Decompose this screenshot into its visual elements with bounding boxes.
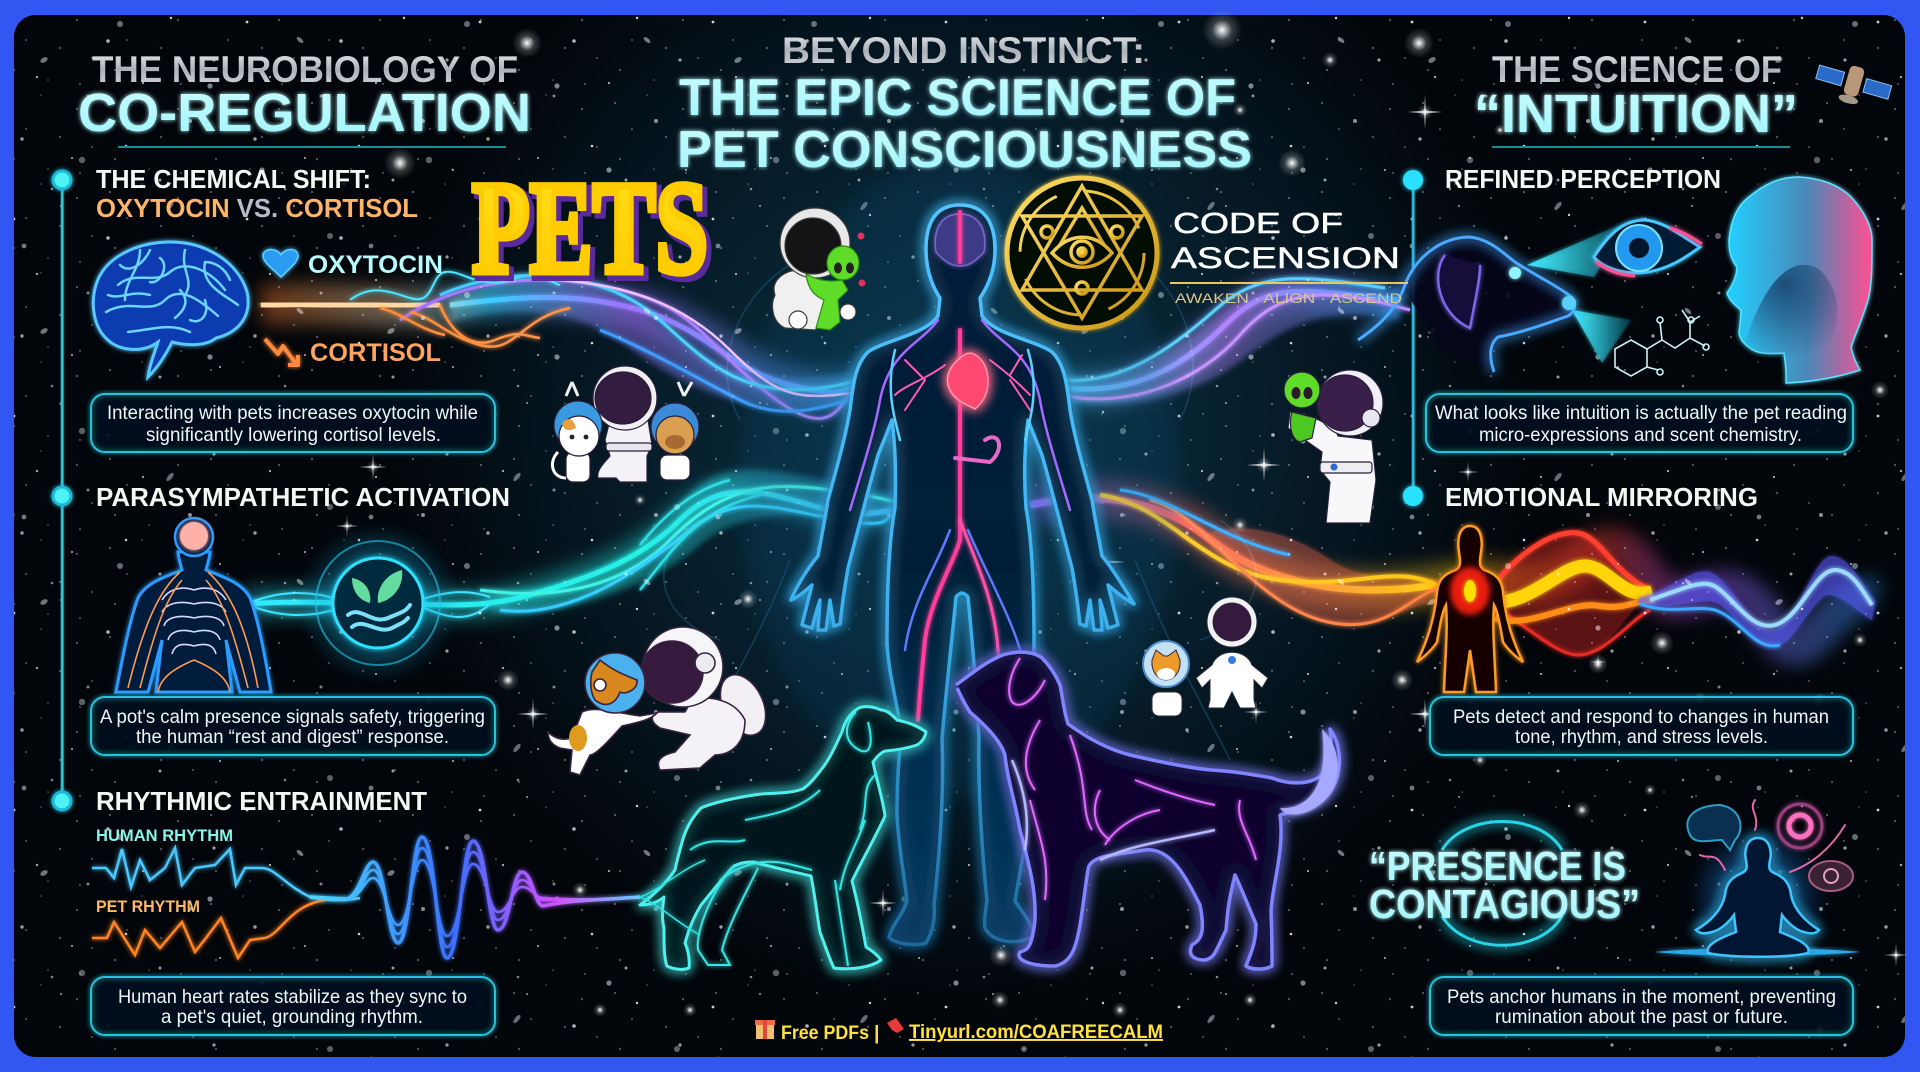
heading: chemical shift (96, 164, 418, 223)
sticker: astronaut with dog in helmet (548, 627, 775, 775)
brain in head (935, 214, 985, 266)
text box: rhythmic entrainment: a pet's quiet, grounding rhythm. (161, 1006, 423, 1028)
panel: intuition heading (1474, 49, 1798, 148)
human figure (740, 160, 1180, 945)
panel: intuition heading: “INTUITION” (1474, 84, 1798, 144)
dog body outline (956, 652, 1339, 969)
text box: emotional mirroring (1430, 697, 1853, 755)
text box: refined perception (1426, 394, 1853, 452)
ring arcs (1442, 822, 1562, 945)
icon: leaf and water orb (296, 521, 460, 685)
pets wordmark: PETS (476, 158, 712, 305)
logo: code of ascension wordmark (1170, 208, 1408, 306)
pet consciousness: PET CONSCIOUSNESS (677, 121, 1252, 179)
heading: refined perception: REFINED PERCEPTION (1445, 164, 1721, 194)
cone to eye (1527, 220, 1631, 277)
callout: presence is contagious: “PRESENCE IS (1369, 843, 1626, 889)
left fire ribbon (1211, 529, 1443, 624)
chart: synced rhythm wave (310, 837, 705, 958)
energy band: body to the intuition dog (1062, 278, 1410, 405)
label: cortisol: CORTISOL (310, 339, 441, 367)
sticker: astronaut with green alien (1284, 370, 1383, 523)
timeline right (1403, 170, 1423, 506)
cone to molecule (1572, 310, 1631, 363)
label: pet rhythm: PET RHYTHM (96, 897, 200, 916)
title: center heading (677, 30, 1252, 179)
timeline left (53, 171, 71, 810)
icon: meditating figure (1655, 823, 1860, 967)
sticker: astronaut with cat and dog (552, 366, 699, 482)
text box: presence: rumination about the past or future. (1495, 1006, 1788, 1028)
chart: pet heartbeat line (92, 900, 325, 958)
text box: rhythmic entrainment: Human heart rates stabilize as they sync to (118, 986, 467, 1008)
icon: dog reading cones (1358, 220, 1631, 372)
icon: oxytocin heart (263, 249, 298, 277)
yellow ribbon (1485, 566, 1652, 603)
vessels (850, 212, 1070, 720)
logo: code of ascension emblem (1007, 178, 1157, 328)
body outline (791, 205, 1134, 945)
footer link: Tinyurl.com/COAFREECALM (909, 1021, 1163, 1043)
logo: code of ascension wordmark: ASCENSION (1171, 242, 1400, 275)
icon: satellite (1812, 56, 1894, 114)
icon: human head profile (1727, 177, 1872, 383)
text box: presence: Pets anchor humans in the moment, preventing (1447, 986, 1836, 1008)
red ribbon (1490, 533, 1650, 655)
icon: nervous system figure (116, 518, 271, 692)
icon: human eye (1594, 220, 1702, 276)
energy band: emotional mirroring fire to blue wave (1030, 490, 1875, 655)
heading: parasympathetic activation: PARASYMPATHETIC ACTIVATION (96, 482, 510, 512)
icon: glowing fire figure (1417, 526, 1523, 692)
sticker: astronaut hugging alien (772, 208, 866, 330)
text box: parasympathetic (91, 697, 495, 755)
dog (651, 382, 699, 480)
dog head outline (1358, 237, 1574, 372)
dog ear and fur lines (1009, 658, 1256, 900)
icon: tail crescent (1280, 729, 1338, 814)
text box: rhythmic entrainment (91, 977, 495, 1035)
label: oxytocin: OXYTOCIN (308, 251, 443, 279)
panel: co-regulation heading: CO-REGULATION (78, 83, 531, 143)
text box: presence (1430, 977, 1853, 1035)
text box: refined perception: micro-expressions and scent chemistry. (1479, 424, 1802, 446)
text box: chemical shift: significantly lowering cortisol levels. (146, 424, 441, 446)
chart: human heartbeat line (92, 848, 360, 900)
text box: parasympathetic: A pot's calm presence signals safety, triggering (100, 706, 485, 728)
text box: chemical shift (91, 394, 495, 452)
logo: code of ascension wordmark: CODE OF (1173, 208, 1343, 240)
footer link: | (874, 1022, 879, 1044)
footer link: Free PDFs (781, 1022, 869, 1044)
the epic science of: THE EPIC SCIENCE OF (679, 69, 1236, 127)
panel: co-regulation heading (78, 49, 531, 148)
logo: code of ascension wordmark: AWAKEN · ALIGN · ASCEND (1175, 291, 1402, 306)
icon: cortisol down arrow (265, 339, 298, 365)
icon: thought swirls (1687, 800, 1853, 891)
dog head shading (1405, 237, 1574, 372)
icon: gift (755, 1020, 775, 1039)
icon: scent molecule (1615, 310, 1709, 376)
text box: emotional mirroring: tone, rhythm, and stress levels. (1515, 726, 1768, 748)
icon: blue brain (93, 242, 248, 377)
text box: chemical shift: Interacting with pets increases oxytocin while (107, 402, 478, 424)
body aura (740, 160, 1180, 800)
dog ear (1438, 255, 1480, 328)
stream strands from the body (1030, 498, 1435, 590)
pets wordmark: PETS (472, 154, 708, 301)
footer link (755, 1018, 1163, 1044)
wave glow (1030, 498, 1875, 646)
faint background veins around the figure (664, 240, 1256, 760)
text box: parasympathetic: the human “rest and digest” response. (136, 726, 449, 748)
beyond instinct: BEYOND INSTINCT: (782, 30, 1145, 71)
violet and blue ribbon (1639, 556, 1875, 647)
icon: pin (884, 1018, 904, 1040)
sticker: shiba and small astronaut (1143, 597, 1268, 716)
panel: co-regulation heading: THE NEUROBIOLOGY OF (92, 49, 518, 90)
cat (552, 382, 602, 482)
heading: chemical shift: OXYTOCIN VS. CORTISOL (96, 193, 418, 223)
dog ear, inner legs and fur lines (690, 712, 875, 966)
dog: large violet (956, 652, 1339, 969)
callout: presence is contagious: CONTAGIOUS” (1369, 881, 1640, 927)
energy band: oxytocin and cortisol stream to the body (261, 272, 860, 418)
callout: presence is contagious (1369, 822, 1640, 945)
heart (947, 353, 988, 409)
astronaut (593, 366, 657, 482)
dog: small cyan (640, 707, 926, 969)
panel: intuition heading: THE SCIENCE OF (1492, 49, 1782, 90)
text box: emotional mirroring: Pets detect and respond to changes in human (1453, 706, 1829, 728)
energy band: calm teal stream (246, 470, 900, 617)
heading: emotional mirroring: EMOTIONAL MIRRORING (1445, 482, 1758, 512)
label: human rhythm: HUMAN RHYTHM (96, 826, 233, 845)
heading: chemical shift: THE CHEMICAL SHIFT: (96, 164, 371, 194)
text box: refined perception: What looks like intuition is actually the pet reading (1435, 402, 1847, 424)
heading: rhythmic entrainment: RHYTHMIC ENTRAINMENT (96, 786, 427, 816)
dog body outline (640, 707, 926, 969)
